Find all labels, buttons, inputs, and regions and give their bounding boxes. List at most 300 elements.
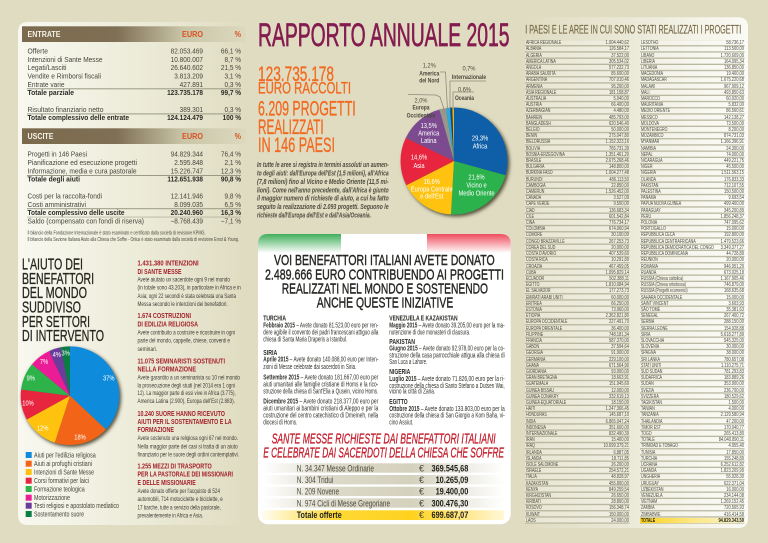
footnotes: Il bilancio della Fondazione Internazionale è stato esaminato e certificato dalla società di revisione KPMG. [28,230,206,236]
countries list: first column values: 485.793,00 [609,115,629,121]
intro paragraph: seguito la realizzazione di 2.093 progetti. Seguono le [257,204,389,211]
table: entrate rows [27,46,241,122]
pie labels: 14,6% [411,154,427,162]
countries list: first column values: 145.687,10 [609,412,629,418]
text block: mezzi di trasporto: 17 barche, tutte a servizio della pastorale, [138,505,221,512]
header: entrate: ENTRATE [28,30,61,39]
countries list: second column names: LETTONIA [641,46,658,52]
countries list: second column names: SENEGAL [641,313,658,319]
table: uscite rows: Totale complessivo delle uscite [28,208,124,217]
countries list: second column names: SÃO TOMÉ [641,307,660,313]
heading: aiuto dei benefattori: PER SETTORI [22,314,90,331]
text block: suore: finanziario per le suore degli ordini contemplativi. [138,452,239,459]
text block: mezzi di trasporto: prevalentemente in Africa e Asia. [138,513,203,520]
headline figures: REALIZZATI [258,116,324,139]
news: siria [263,348,379,427]
countries list: second column names: SUDAFRICA [641,375,662,381]
header: uscite: USCITE [28,132,54,141]
countries list: first column values: 748.181,34 [609,332,629,338]
countries list: second column names: UZBEKISTAN [641,487,663,493]
news: egitto: cino Assiut. [389,420,413,427]
table: uscite rows: Informazione, media e cura pastorale [28,166,136,175]
news: siria: diocesi di Homs. [263,420,297,427]
legend: sectors: Motorizzazione [34,493,70,502]
countries list: second column names: LITUANIA [641,65,657,71]
countries list: first column values: 1.152.323,16 [606,139,629,145]
table: uscite rows: Costi per la raccolta-fondi [28,192,102,200]
countries list: first column names: COLOMBIA [526,226,545,232]
countries list: first column names: BRASILE [526,158,541,164]
table: entrate rows: 10.800.007 [171,57,203,64]
countries list: first column names: INDIA [526,419,535,425]
countries list: second column names: TOGO [641,431,651,437]
countries list: first column values: 37.594,64 [611,344,629,350]
countries list: first column names: GHANA [526,363,539,369]
countries list: second column values: 183.889,26 [724,375,744,381]
countries list: first column names: IRLANDA [526,450,541,456]
news: egitto [389,397,505,427]
countries list: second column names: STATI UNITI [641,363,661,369]
intro paragraph: richieste dall'Europa dell'Est e dall'Asia/Oceania. [257,212,371,220]
countries list: second column names: LIBERIA [641,59,655,65]
callouts: small areas: America [419,70,440,77]
countries list: second column values: 712.107,55 [724,183,744,189]
news: siria: Settembre 2015 – Avete donato 181.667,00 euro per [263,374,379,381]
countries list: first column names: HONDURAS [526,412,546,418]
countries list: second column values: 38.000,00 [726,350,744,356]
countries list: second column values: 3.349.377,27 [721,245,744,251]
heading: aiuto dei benefattori: DI INTERVENTO [22,328,104,345]
table: entrate rows: Risultato finanziario netto [28,105,104,114]
countries list: first column names: LAOS [526,518,535,524]
countries list: second column values: 3.603,93 [728,301,744,307]
countries list: second column values: 35.381,63 [726,307,744,313]
countries list: second column names: MAURITANIA [641,102,663,108]
countries list: first column values: 486.113,50 [609,177,629,183]
countries list: second column names: MONTENEGRO [641,127,667,133]
countries list: second column names: SVEZIA [641,388,654,394]
countries list: second column names: MAROCCO [641,96,660,102]
table: mass offerings: € [419,498,424,508]
countries list: first column values: 3.527,09 [613,195,629,201]
callouts: small areas: 0,6% [458,86,471,93]
news: siria: Dicembre 2015 – Avete donato 218.377,00 euro per [263,398,379,405]
pie chart: sectors: 18% [74,434,86,442]
table: entrate rows: 3.813.209 [174,73,203,81]
countries list: first column values: 577.232,73 [609,65,629,71]
news: pakistan: struzione della casa parrocchiale attigua alla chiesa di [389,352,505,359]
countries list: first column names: IRAQ [526,443,535,449]
countries list: second column names: LESOTHO [641,40,658,46]
news: siria: zioni di Messe celebrate dai sacerdoti in Siria. [263,364,356,371]
header: uscite: EURO [182,132,203,141]
heading: aiuto dei benefattori: L'AIUTO DEI [22,256,83,274]
headline figures: IN 146 PAESI [258,134,335,157]
text block: mezzi di trasporto: Avete donato offerte per l'acquisto di 524 [138,488,220,495]
countries list: first column values: 156.348,74 [609,505,629,511]
pie labels: Medio Oriente [459,190,495,198]
table: mass offerings: N. 209 Novene [297,487,339,497]
countries list: second column names: REPUBBLICA CECA [641,232,675,238]
countries list: first column names: AZERBAIGIAN [526,108,550,114]
countries list: second column names: ZAMBIA [641,505,654,511]
callouts: small areas: Europa [412,105,430,112]
countries list: first column names: ISLANDA [526,456,541,462]
countries list: first column values: 502.388,11 [609,276,629,282]
countries list: first column values: 227.491,70 [609,319,629,325]
countries list: second column values: 1.511.563,15 [721,170,744,176]
table: uscite rows: 15.226.747 [171,168,203,175]
countries list: second column values: 15.000,00 [726,226,744,232]
countries list: second column values: 746.879,00 [724,282,744,288]
countries list: second column names: PANAMA [641,195,656,201]
header: entrate: % [235,29,241,39]
footnotes: Il bilancio della Sezione Italiana Aiuto alla Chiesa che Soffre - Onlus è stato esaminato dalla società di revisione Ernst & Young. [28,237,239,243]
title: RAPPORTO ANNUALE 2015 [258,17,510,53]
pie chart: sectors: 4% [53,351,61,359]
countries list: first column values: 60.000,00 [611,295,629,301]
countries list: second column names: TANZANIA [641,412,658,418]
heading: aiuto dei benefattori: BENEFATTORI [22,271,94,288]
countries list: first column values: 849.259,54 [609,487,629,493]
countries list: second column values: 150.500,00 [724,189,744,195]
text block: suore: Avete sostenuto una religiosa ogni 67 nel mondo. [138,435,238,442]
text block: seminaristi: 11.075 SEMINARISTI SOSTENUTI [138,357,225,366]
countries list: first column values: 455.800,00 [609,481,629,487]
countries list: second column names: SIRIA [641,332,650,338]
countries list: second column values: 1.720.609,00 [721,53,744,59]
countries list: first column values: 18.150,00 [611,400,629,406]
countries list: second column names: MALI [641,90,649,96]
callouts: small areas: 1,2% [423,62,436,69]
countries list: second column values: 345.200,89 [724,208,744,214]
countries list: first column values: 2.675.268,46 [606,158,629,164]
table: entrate rows: Vendite e Rimborsi fiscali [28,72,101,80]
countries list: second column values: 234.144,08 [724,493,744,499]
heading: sante messe: E CELEBRATE DAI SACERDOTI DELLA CHIESA CHE SOFFRE [263,445,505,462]
headline figures: EURO RACCOLTI [258,80,351,98]
countries list: first column names: KIRIBATI [526,499,541,505]
countries list: second column values: 15.000,00 [726,295,744,301]
countries list: first column names: ARABIA SAUDITA [526,71,555,77]
countries list: second column values: 164.095,34 [724,59,744,65]
countries list: second column names: MADAGASCAR [641,77,667,83]
text block: seminaristi [138,357,240,405]
pie labels: 21,6% [468,174,485,182]
countries list: first column values: 18.711,85 [612,456,629,462]
countries list: first column names: AFRICA REGIONALE [526,40,561,46]
countries list: first column values: 150.000,00 [609,512,629,518]
table: uscite rows: Progetti in 146 Paesi [28,150,87,158]
table: uscite rows: −8.768.439 [170,218,203,226]
countries list: second column names: UNGHERIA [641,474,660,480]
news: venezuela e kazakistan: VENEZUELA E KAZAKISTAN [389,314,458,322]
countries list: second column values: 24.300,00 [726,146,744,152]
news: venezuela e kazakistan: Maggio 2015 – Avete donato 39.205,00 euro per la ma- [389,322,505,329]
countries list: second column values: 6.252.612,82 [721,462,744,468]
countries list: first column values: 148.800,00 [609,164,629,170]
news: turchia [263,314,379,343]
text block: suore: 10.240 SUORE HANNO RICEVUTO [138,409,225,418]
countries list: first column names: ISOLE SALOMONE [526,462,558,468]
countries list: first column names: COSTA RICA [526,257,547,263]
table: uscite rows: 12.141.946 [171,193,203,201]
news: siria: SIRIA [263,348,278,357]
countries list: second column names: OLANDA [641,177,656,183]
header: uscite [22,128,246,144]
countries list: second column names: VIETNAM [641,499,657,505]
heading: voi benefattori italiani: VOI BENEFATTORI ITALIANI AVETE DONATO [274,252,495,269]
countries list: first column values: 267.253,73 [609,239,629,245]
countries list: second column names: SRI LANKA [641,357,660,363]
countries list: first column values: 66.250,00 [611,301,629,307]
countries list: second column values: 1.675.220,68 [721,77,744,83]
countries list: first column values: 305.534,02 [609,59,629,65]
table: uscite rows: 2.595.848 [174,160,203,167]
news: pakistan: San Luca a Lahore. [389,359,427,366]
countries list: first column values: 91.900,00 [611,350,629,356]
callouts: small areas: Oceania [455,95,474,102]
news: nigeria: NIGERIA [389,367,411,376]
countries list: first column values: 1.095.829,14 [606,270,629,276]
text block: mezzi di trasporto: PER LA PASTORALE DEI MISSIONARI [138,470,233,479]
countries list: second column names: SIERRA LEONE [641,326,667,332]
pie chart: sectors: 10% [22,400,34,408]
countries list: first column names: COMORE [526,232,542,238]
countries list: first column names: BURKINA FASO [526,170,552,176]
countries list: first column names: CINA [526,220,534,226]
countries list: first column names: ARGENTINA [526,77,547,83]
countries list: second column values: 493.850,63 [724,90,744,96]
countries list: second column values: 720.565,93 [724,505,744,511]
countries list: first column values: 181.158,87 [609,90,629,96]
countries list: second column values: 747.095,62 [724,220,744,226]
countries list: first column names: BURUNDI [526,177,542,183]
countries list: second column names: SLOVENIA [641,344,659,350]
intro paragraph: il maggior numero di richieste di aiuto, a cui ha fatto [257,196,389,203]
countries list: second column names: LIBANO [641,53,654,59]
countries list: second column names: ZIMBABWE [641,512,660,518]
news: siria: aiuti umanitari ai bambini cristiani di Aleppo e per la [263,406,378,413]
countries list: first column values: 73.960,00 [611,307,629,313]
countries list: first column names: BENIN [526,133,537,139]
countries list: second column names: TRINIDAD E TOBAGO [641,443,678,449]
legend: sectors: Testi religiosi e apostolato mediatico [34,501,119,510]
countries list: first column names: CIAD [526,208,534,214]
table: mass offerings: 19.400,00 [436,487,469,497]
countries list: first column values: 1.351.461,20 [606,152,629,158]
countries list: first column names: IRAN [526,437,534,443]
pie labels: Europa Centrale [411,186,453,194]
countries list: second column values: 4.955,40 [728,443,744,449]
table: uscite rows: 16,3 % [221,210,241,217]
countries list: second column values: 874.731,03 [724,133,744,139]
countries list: first column values: 1.526.452,00 [606,189,629,195]
table: uscite rows: −7,1 % [221,218,241,226]
text block: costruzioni [138,311,235,353]
countries list: first column names: ALGERIA [526,53,541,59]
headline figures: 6.209 PROGETTI [258,98,356,121]
countries list: second column values: 170.040,77 [724,425,744,431]
countries list: second column values: 8.200,00 [728,127,744,133]
countries list: first column values: 10.699.379,21 [603,443,629,449]
countries list: second column values: 155.248,89 [724,456,744,462]
countries list: second column values: 4.000,00 [728,406,744,412]
countries list: first column values: 22.850,00 [611,183,629,189]
countries list: second column values: 47.200,00 [726,419,744,425]
countries list: first column names: GUATEMALA [526,381,548,387]
countries list: second column names: PORTOGALLO [641,226,666,232]
news: venezuela e kazakistan [389,314,505,337]
countries list: second column values: 781.293,83 [724,369,744,375]
table: entrate rows: 427.891 [180,82,203,89]
text block: suore: Nella maggior parte dei casi si tratta di un aiuto [138,443,238,450]
table: mass offerings: N. 304 Tridui [297,475,333,485]
countries list: second column values: 267.400,72 [724,313,744,319]
countries list: first column values: 254.572,21 [609,468,629,474]
heading: voi benefattori italiani: ANCHE QUESTE INIZIATIVE [317,294,453,311]
countries list: second column names: MEDIO ORIENTE [641,108,670,114]
countries list: second column values: 5.618.277,89 [721,332,744,338]
table: uscite rows: 20.240.960 [171,210,203,217]
pie labels: Asia [413,162,425,170]
table: entrate rows: 26.640.602 [171,65,203,72]
countries list: first column values: 177.273,73 [609,288,629,294]
heading: sante messe: SANTE MESSE RICHIESTE DAI BENEFATTORI ITALIANI [272,430,496,447]
countries list: first column names: EMIRATI ARABI UNITI [526,295,562,301]
countries list: second column values: 288.150,00 [724,319,744,325]
countries list: first column values: 1.247.366,45 [606,406,629,412]
countries list: first column values: 136.683,34 [609,208,629,214]
countries list: second column values: 545.325,00 [724,338,744,344]
countries list: first column names: ESTONIA [526,307,542,313]
countries list: second column values: 673.025,18 [724,270,744,276]
news: nigeria: Luglio 2015 – Avete donato 71.826,00 euro per la ri- [389,376,505,383]
news: pakistan [389,337,505,366]
table: mass offerings: N. 974 Cicli di Messe Gregoriane [297,498,390,508]
text block: intenzioni: Asia; ogni 22 secondi è stata celebrata una Santa [138,293,236,300]
text block: costruzioni: Avete contribuito a costruire e ricostruire in ogni [138,330,235,337]
countries list: second column values: 265.413,80 [724,431,744,437]
intro paragraph: In tutte le aree si registra in termini assoluti un aumen- [257,162,389,169]
countries list: second column values: 19.400,00 [726,71,744,77]
table: mass offerings: € [419,510,424,520]
countries list: first column names: GUINEA CONAKRY [526,394,558,400]
countries list: first column values: 20.000,00 [611,245,629,251]
countries list: first column values: 151.945,69 [609,381,629,387]
countries list: second column values: 1.823.209,99 [721,468,744,474]
news: nigeria: costruzione della chiesa di Santo Stefano a Dutsen Wai, [389,383,505,390]
countries list: first column values: 229.100,00 [609,357,629,363]
countries list: second column values: 168.635,68 [724,288,744,294]
countries list: second column names: RUSSIA (Progetti ecumenici) [641,288,687,294]
countries list: second column names: PAKISTAN [641,183,658,189]
table: entrate rows: 82.053.469 [171,48,203,56]
countries list: first column values: 832.490,39 [609,431,629,437]
countries list: first column names: BAHREIN [526,115,542,121]
heading: aiuto dei benefattori: SUDDIVISO [22,300,81,317]
news: turchia: Febbraio 2015 – Avete donato 81.523,00 euro per ren- [263,322,379,329]
legend: sectors: Intenzioni di Sante Messe [34,468,94,476]
countries list: first column values: 2.362.821,80 [606,313,629,319]
text block: intenzioni [138,259,241,308]
countries list: second column names: URUGUAY [641,481,659,487]
news: pakistan: Giugno 2015 – Avete donato 92.978,00 euro per la co- [389,346,505,353]
countries list: first column names: INDONESIA [526,425,546,431]
countries list: first column values: 407.539,60 [609,251,629,257]
countries list: first column names: AUSTRALIA [526,96,546,102]
countries list: second column values: 44.728,89 [726,251,744,257]
text block: costruzioni: seminari. [138,346,157,353]
countries list: second column values: 1.856.248,37 [721,214,744,220]
table: entrate rows: 124.124.479 [167,115,203,122]
countries list: second column values: 9.693,54 [728,195,744,201]
heading: aiuto dei benefattori [22,256,104,345]
heading: voi benefattori italiani: 2.489.666 EURO CONTRIBUENDO AI PROGETTI [265,266,504,283]
callouts: small areas: Internazionale [452,74,486,81]
table: uscite rows: 90,8 % [221,176,241,184]
countries list: first column values: 674.060,94 [609,226,629,232]
heading: voi benefattori italiani [265,252,504,311]
table: mass offerings: 369.545,68 [431,464,469,473]
countries list: second column names: MYANMAR [641,139,659,145]
countries list: second column names: REUNION [641,257,657,263]
countries list: first column values: 587.370,00 [609,338,629,344]
countries list: second column values: 20.000,00 [726,257,744,263]
countries list: second column names: UCRAINA [641,462,657,468]
countries list: first column names: HAITI [526,406,535,412]
countries list: first column names: CAMERUN [526,189,544,195]
countries list: first column names: CAPE VERDE [526,201,549,207]
countries list: first column names: GIORDANIA [526,369,546,375]
countries list: first column names: EGITTO [526,282,539,288]
table: uscite rows: 112.651.938 [167,176,203,184]
callouts: small areas: 2,0% [414,97,428,104]
countries list: second column names: NIGERIA [641,170,656,176]
news: siria: costruzione del centro catechistico di Dmeineh, nella [263,413,378,420]
table: entrate rows: 0,3 % [224,82,241,89]
countries list: second column values: 60.920,00 [726,96,744,102]
intro paragraph [257,162,389,220]
legend: sectors: Sostentamento suore [34,510,84,518]
pie chart: sectors [21,346,121,447]
countries list: second column names: TIMOR EST [641,425,660,431]
countries list: first column names: GABON [526,344,539,350]
countries list: second column values: 180.529,62 [724,394,744,400]
countries list: second column names: ROMANIA [641,264,658,270]
heading: voi benefattori italiani: REALIZZATI NEL MONDO E SOSTENENDO [282,280,488,297]
pie chart: geographic areas [401,108,510,216]
countries list: second column values: 176.833,33 [724,177,744,183]
countries list: second column values: 113.500,00 [724,46,744,52]
countries list: second column names: PARAGUAY [641,208,660,214]
countries list: second column values: 1.167.905,46 [721,276,744,282]
countries list: first column values: 601.542,84 [609,214,629,220]
countries list: first column names: CAMBOGIA [526,183,545,189]
countries list: second column values: 154.928,88 [724,326,744,332]
table: entrate rows: 3,1 % [224,73,241,81]
countries list: first column names: ISRAELE [526,468,541,474]
countries list: first column names: GUINEA EQUATORIALE [526,400,566,406]
countries list: first column values: 95.200,00 [611,84,629,90]
countries list: second column values: 16.000,00 [726,487,744,493]
table: uscite rows: Saldo (compensato con fondi di riserva) [28,217,144,226]
news: siria: Aprile 2015 – Avete donato 140.088,00 euro per Inten- [263,357,379,364]
countries list: first column names: BOSNIA-ERZEGOVINA [526,152,564,158]
countries list: first column values: 1.004.277,48 [606,170,629,176]
text block: costruzioni: 1.674 COSTRUZIONI [138,311,191,320]
countries list: first column values: 275.047,80 [609,133,629,139]
